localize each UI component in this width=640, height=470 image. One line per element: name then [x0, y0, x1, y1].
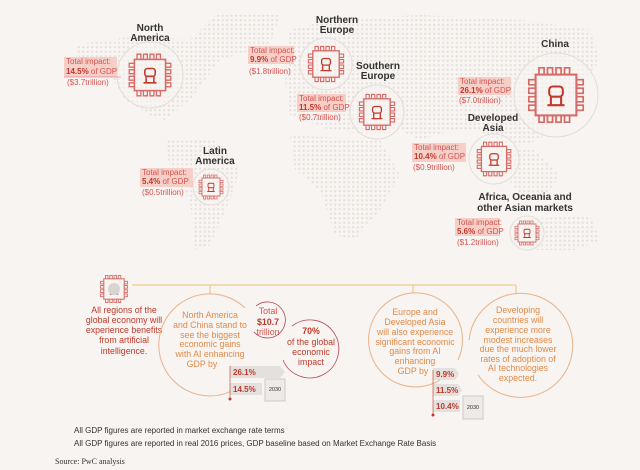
- panel: North America and China: see the biggest: [180, 330, 240, 340]
- callout: 70%: [283, 320, 339, 378]
- source: Source: PwC analysis: [55, 457, 125, 466]
- region: North America: [64, 23, 183, 108]
- panel: Europe and Developed Asia: [369, 293, 463, 387]
- panel: developing countries: modest increases: [484, 335, 553, 345]
- panel: North America and China: [159, 294, 247, 396]
- region: Africa, Oceania: Total impact:: [457, 218, 502, 227]
- bars: NA & China: 14.5%: [233, 385, 256, 394]
- region: North America: America: [130, 33, 170, 44]
- region: China: China: [541, 39, 569, 50]
- region: China: [458, 39, 598, 137]
- text: all regions: All regions of the: [91, 305, 157, 315]
- panel: North America and China: GDP by: [187, 359, 218, 369]
- bars: Europe & Asia: 10.4%: [436, 402, 459, 411]
- bars: NA & China: [228, 366, 285, 401]
- callout: 70%: economic: [292, 347, 330, 357]
- text: all regions: intelligence.: [101, 346, 147, 356]
- region: North America: 14.5% of GDP: [66, 67, 117, 76]
- callout: 70%: of the global: [287, 337, 335, 347]
- footnotes: [74, 426, 436, 448]
- icon: global chip: [100, 275, 128, 303]
- region: Northern Europe: Total impact:: [250, 46, 295, 55]
- panel: developing countries: [469, 293, 573, 397]
- panel: Europe and Developed Asia: gains from AI: [389, 346, 441, 356]
- connector line: [132, 285, 516, 294]
- panel: North America and China: and China stand to: [173, 320, 247, 330]
- region: Africa, Oceania: [455, 192, 573, 250]
- region: Developed Asia: Developed: [468, 113, 518, 124]
- region: Developed Asia: 10.4% of GDP: [414, 152, 465, 161]
- region: Developed Asia: Total impact:: [414, 143, 459, 152]
- region: Africa, Oceania: Africa, Oceania and: [478, 192, 572, 203]
- callout: 70%: 70%: [302, 326, 320, 336]
- region: Africa, Oceania: other Asian markets: [477, 203, 573, 214]
- footnotes: All GDP figures are reported in market exchange rate terms: [74, 426, 285, 435]
- region: China: 26.1% of GDP: [460, 86, 511, 95]
- panel: developing countries: due the much lower: [480, 344, 556, 354]
- bars: Europe & Asia: 9.9%: [436, 370, 454, 379]
- text: all regions: global economy will: [86, 315, 162, 325]
- panel: Europe and Developed Asia: Developed Asia: [384, 317, 446, 327]
- bars: NA & China: 2030: [269, 387, 281, 393]
- region: Northern Europe: Northern: [316, 15, 358, 26]
- bars: Europe & Asia: [432, 368, 483, 419]
- panel: developing countries: countries will: [493, 315, 543, 325]
- panel: North America and China: North America: [182, 310, 238, 320]
- region: Latin America: America: [195, 156, 235, 167]
- panel: Europe and Developed Asia: significant economic: [375, 337, 455, 347]
- region: Southern Europe: Southern: [356, 61, 400, 72]
- panel: North America and China: economic gains: [179, 339, 241, 349]
- region: China: ($7.0trillion): [459, 96, 501, 105]
- panel: developing countries: rates of adoption of: [480, 354, 556, 364]
- text: all regions: [86, 305, 163, 356]
- region: Latin America: Latin: [203, 146, 227, 157]
- text: all regions: experience benefits: [86, 325, 163, 335]
- bars: Europe & Asia: 11.5%: [436, 386, 458, 395]
- panel: developing countries: expected.: [499, 373, 537, 383]
- bars: Europe & Asia: 2030: [467, 405, 479, 411]
- callout: total $10.7 trillion: Total: [259, 306, 277, 316]
- region: Developed Asia: [412, 113, 519, 184]
- region: Africa, Oceania: ($1.2trillion): [457, 238, 499, 247]
- region: Latin America: 5.4% of GDP: [142, 177, 189, 186]
- region: Southern Europe: ($0.7trillion): [299, 113, 341, 122]
- callout: total $10.7 trillion: [254, 302, 285, 338]
- panel: developing countries: Developing: [496, 305, 540, 315]
- callout: total $10.7 trillion: trillion: [257, 327, 280, 337]
- region: Latin America: Total impact:: [142, 168, 187, 177]
- panel: Europe and Developed Asia: enhancing: [395, 356, 435, 366]
- region: Developed Asia: Asia: [482, 123, 504, 134]
- region: Developed Asia: ($0.9trillion): [413, 163, 455, 172]
- footnotes: All GDP figures are reported in real 2016 prices, GDP baseline based on Market Exchange Rate Basis: [74, 439, 436, 448]
- region: Southern Europe: [297, 61, 404, 139]
- bars: NA & China: 26.1%: [233, 368, 256, 377]
- region: Latin America: ($0.5trillion): [142, 188, 184, 197]
- panel: developing countries: AI technologies: [488, 363, 549, 373]
- region: Latin America: [140, 146, 235, 205]
- callout: 70%: impact: [298, 357, 325, 367]
- region: China: Total impact:: [460, 77, 505, 86]
- panel: developing countries: experience more: [485, 325, 551, 335]
- region: Southern Europe: 11.5% of GDP: [299, 103, 350, 112]
- text: all regions: from artificial: [99, 335, 149, 345]
- region: Southern Europe: Europe: [361, 71, 396, 82]
- region: North America: ($3.7trillion): [67, 78, 109, 87]
- region: Northern Europe: ($1.8trillion): [249, 67, 291, 76]
- region: North America: North: [137, 23, 163, 34]
- panel: Europe and Developed Asia: GDP by: [398, 366, 429, 376]
- region: Northern Europe: Europe: [320, 25, 355, 36]
- panel: Europe and Developed Asia: will also experience: [376, 327, 453, 337]
- region: Northern Europe: 9.9% of GDP: [250, 55, 297, 64]
- panel: North America and China: with AI enhancing: [175, 349, 245, 359]
- panel: Europe and Developed Asia: Europe and: [392, 307, 438, 317]
- region: North America: Total impact:: [66, 57, 111, 66]
- region: Africa, Oceania: 5.6% of GDP: [457, 227, 504, 236]
- world map dots: [75, 15, 600, 250]
- region: Southern Europe: Total impact:: [299, 94, 344, 103]
- region: Northern Europe: [248, 15, 358, 90]
- callout: total $10.7 trillion: $10.7: [257, 317, 279, 327]
